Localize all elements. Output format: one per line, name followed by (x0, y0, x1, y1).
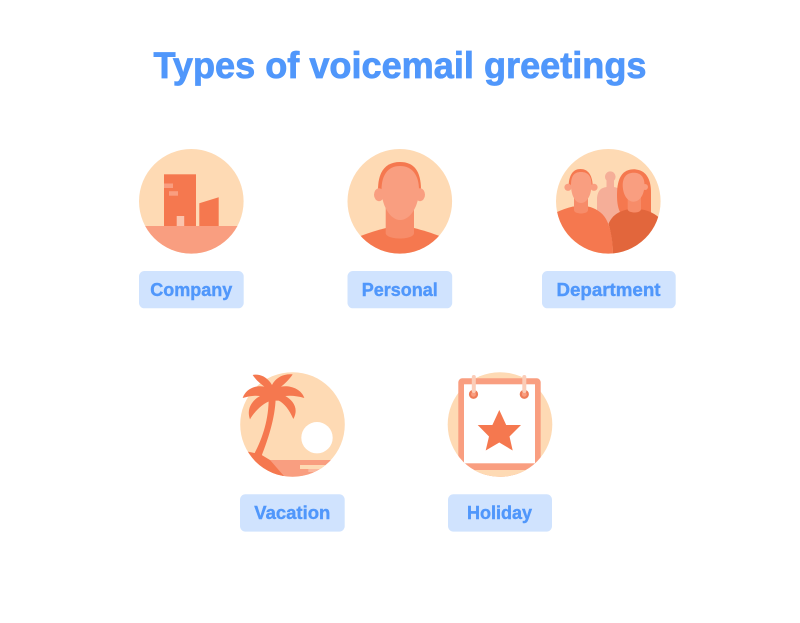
icon: palm tree beach (240, 372, 345, 477)
card: company (135, 149, 250, 308)
left man (557, 169, 613, 254)
icon: calendar with star (448, 372, 552, 480)
label: Holiday (448, 494, 552, 532)
label: Personal (348, 271, 452, 308)
label: Department: Department (556, 280, 660, 300)
icon: company building (139, 149, 244, 254)
background person (597, 171, 620, 224)
right woman (608, 169, 661, 256)
icon: person (348, 149, 452, 256)
label: Vacation: Vacation (254, 503, 330, 523)
label: Department (542, 271, 676, 308)
card: department (542, 149, 676, 308)
card: holiday (448, 372, 552, 532)
label: Holiday: Holiday (467, 503, 532, 523)
label: Vacation (240, 494, 345, 532)
label: Company: Company (150, 280, 232, 300)
title: Types of voicemail greetings (154, 44, 646, 86)
label: Personal: Personal (362, 280, 438, 300)
card: personal (348, 149, 452, 308)
label: Company (139, 271, 244, 308)
icon: group of people (550, 149, 661, 256)
card: vacation (235, 372, 350, 532)
